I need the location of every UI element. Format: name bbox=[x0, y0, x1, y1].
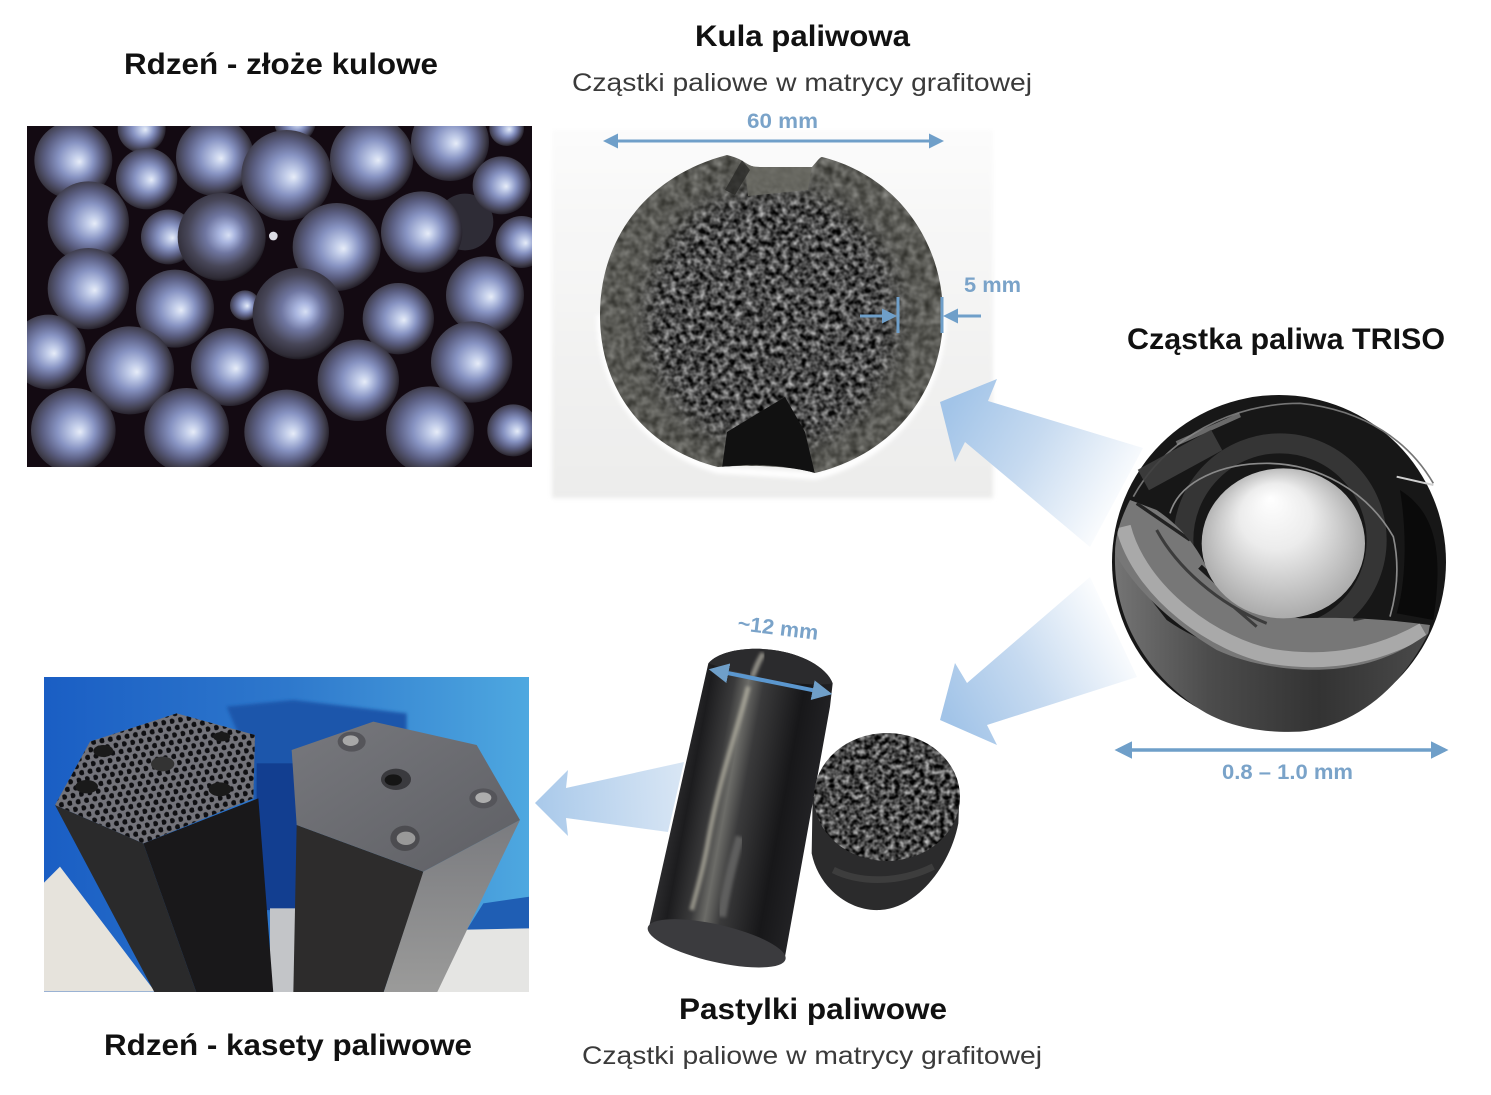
heading: Kula paliwowa: Kula paliwowa bbox=[695, 20, 910, 53]
heading: Pastylki paliwowe: Pastylki paliwowe bbox=[679, 993, 947, 1026]
block with pins (right) bbox=[292, 722, 520, 993]
dimension: 60 mm: 60 mm bbox=[747, 110, 818, 133]
arrow: TRISO to fuel pebble bbox=[940, 379, 1143, 547]
fractured band bbox=[1115, 500, 1430, 670]
diameter arrow bbox=[713, 670, 828, 693]
heading: Pastylki paliwowe: Cząstki paliowe w matrycy grafitowej bbox=[582, 1042, 1042, 1070]
photo: fuel pebble cross-section bbox=[552, 110, 1021, 498]
pellet end texture bbox=[810, 730, 962, 865]
heading: Kula paliwowa: Cząstki paliowe w matrycy grafitowej bbox=[572, 69, 1032, 97]
dimension: ~12 mm: ~12 mm bbox=[736, 612, 820, 645]
arrow: TRISO to pellets bbox=[940, 577, 1137, 745]
photo: TRISO particle bbox=[1112, 395, 1446, 784]
small pellet bbox=[812, 797, 959, 910]
lower hemisphere bbox=[1115, 553, 1428, 732]
shell layers bbox=[1183, 443, 1377, 637]
photo: fuel pellets bbox=[644, 649, 962, 977]
block with channels (left) bbox=[55, 713, 273, 993]
pebble body bbox=[595, 150, 950, 480]
heading: Cząstka paliwa TRISO: Cząstka paliwa TRISO bbox=[1127, 323, 1445, 356]
dimension: 5 mm: 5 mm bbox=[964, 274, 1021, 297]
dimension: 0.8-1.0 mm: 0.8 – 1.0 mm bbox=[1222, 761, 1353, 784]
arrow: pellets to fuel assembly bbox=[535, 762, 684, 836]
photo: pebble bed core bbox=[27, 126, 532, 467]
heading: Pastylki paliwowe bbox=[582, 993, 1042, 1070]
long pellet bbox=[644, 649, 833, 977]
heading: Rdzeń - kasety paliwowe: Rdzeń - kasety paliwowe bbox=[104, 1029, 472, 1062]
photo: fuel assembly blocks bbox=[43, 677, 530, 993]
heading: Rdzeń - złoże kulowe: Rdzeń - złoże kulowe bbox=[124, 48, 438, 81]
kernel bbox=[1202, 468, 1365, 618]
heading: Kula paliwowa bbox=[572, 20, 1032, 97]
